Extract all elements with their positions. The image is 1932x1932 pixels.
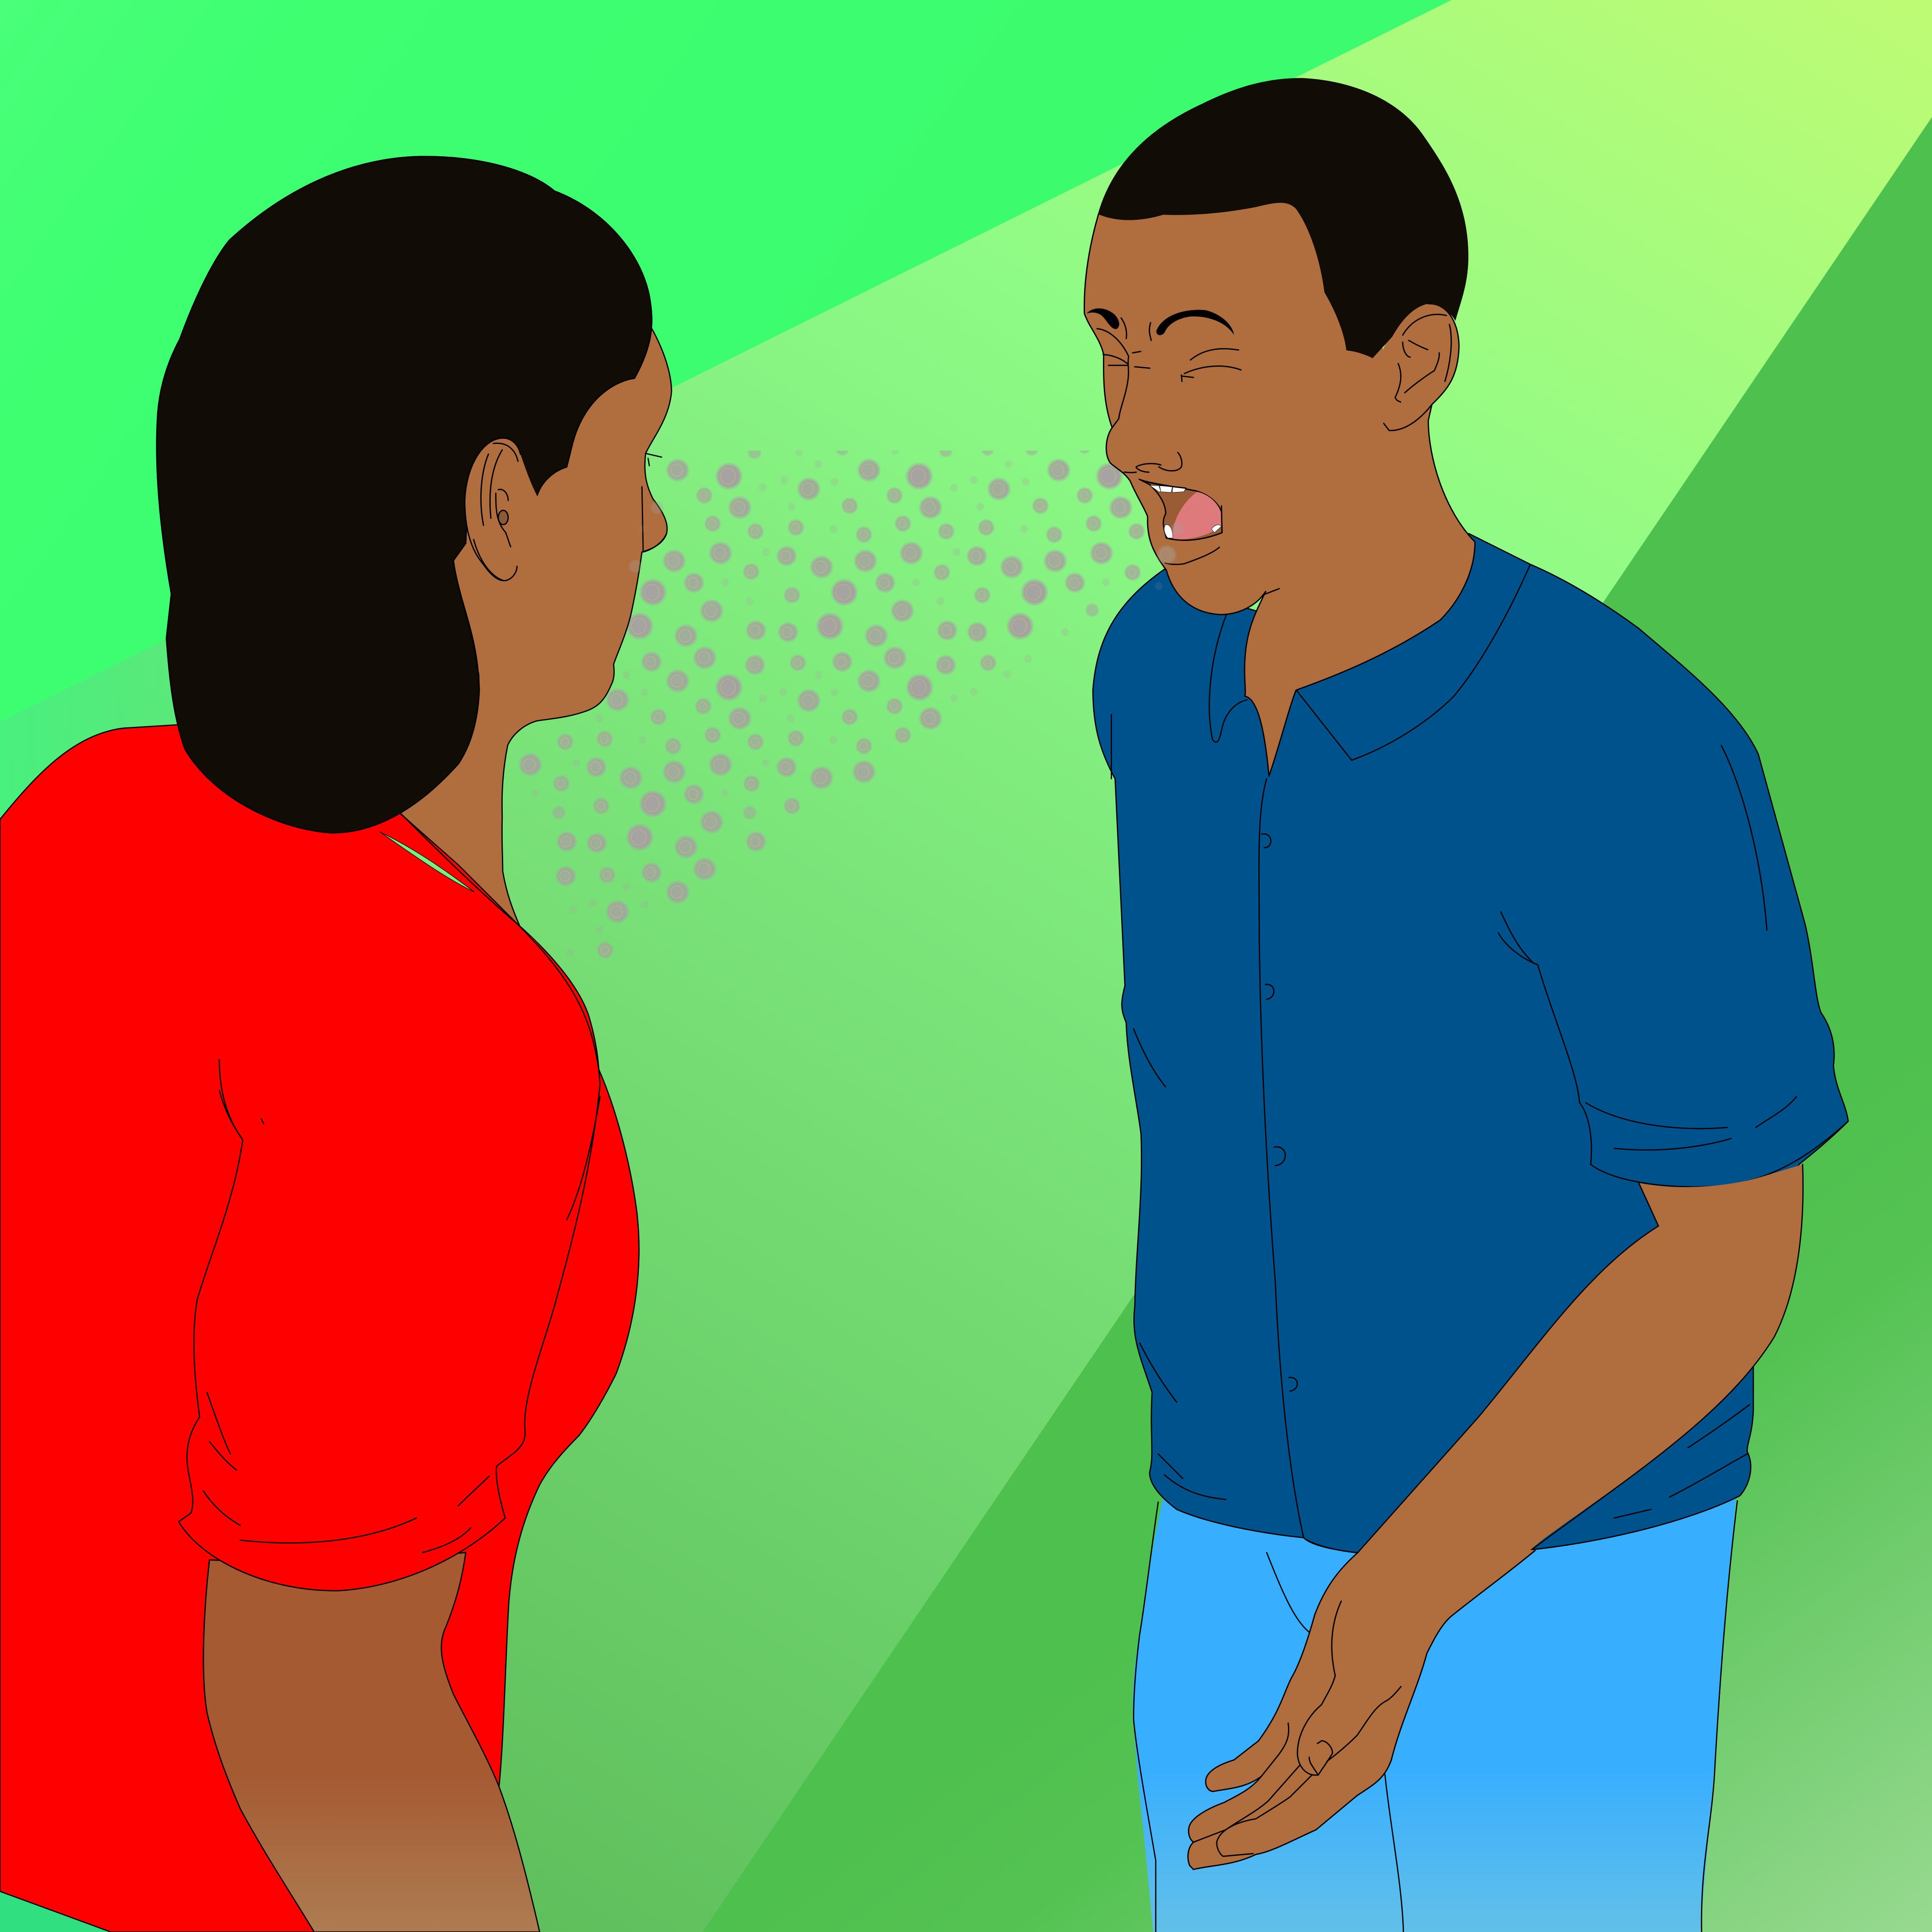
lower right green band: [702, 117, 1932, 1932]
man lips lines: [1139, 479, 1222, 565]
man eyes and creases: [1097, 318, 1241, 428]
woman collar sliver: [380, 832, 474, 892]
droplets over faces: [628, 500, 1185, 590]
man tongue: [1173, 492, 1222, 540]
man nose: [1124, 453, 1182, 473]
woman eyelash and nose line: [642, 453, 667, 552]
man teeth: [1150, 485, 1221, 538]
man buttons: [1262, 834, 1297, 1391]
woman short sleeve: [179, 924, 600, 1591]
beam left glow: [0, 477, 493, 1109]
man face outline: [1084, 214, 1475, 776]
halftone speech droplets: [518, 440, 1145, 959]
man eyebrows: [1087, 308, 1234, 335]
woman figure: [0, 156, 671, 1932]
man collar: [1209, 564, 1530, 760]
man neck and head: [1084, 78, 1475, 776]
man hair: [1098, 78, 1468, 358]
man ear details: [1384, 314, 1451, 431]
woman arm: [204, 1552, 540, 1932]
man arm outline: [1358, 1164, 1803, 1616]
woman hair: [157, 156, 652, 833]
man jeans: [1133, 1493, 1736, 1932]
man figure: [1084, 78, 1848, 1932]
woman ear: [465, 438, 537, 580]
woman necklace line: [401, 813, 517, 924]
man jeans seams: [1133, 1501, 1738, 1932]
man shirt: [1093, 534, 1848, 1552]
man mouth interior: [1139, 479, 1222, 540]
woman sleeve lines: [179, 924, 600, 1591]
man arm: [1358, 1164, 1803, 1616]
man sleeve cuff and fold lines: [1112, 715, 1848, 1518]
man placket line: [1259, 779, 1355, 1552]
woman red shirt: [0, 725, 639, 1932]
woman neck and face: [394, 296, 671, 927]
upper left green band: [0, 0, 1452, 722]
hand finger creases: [1194, 1601, 1401, 1856]
man hand: [1188, 1535, 1535, 1869]
